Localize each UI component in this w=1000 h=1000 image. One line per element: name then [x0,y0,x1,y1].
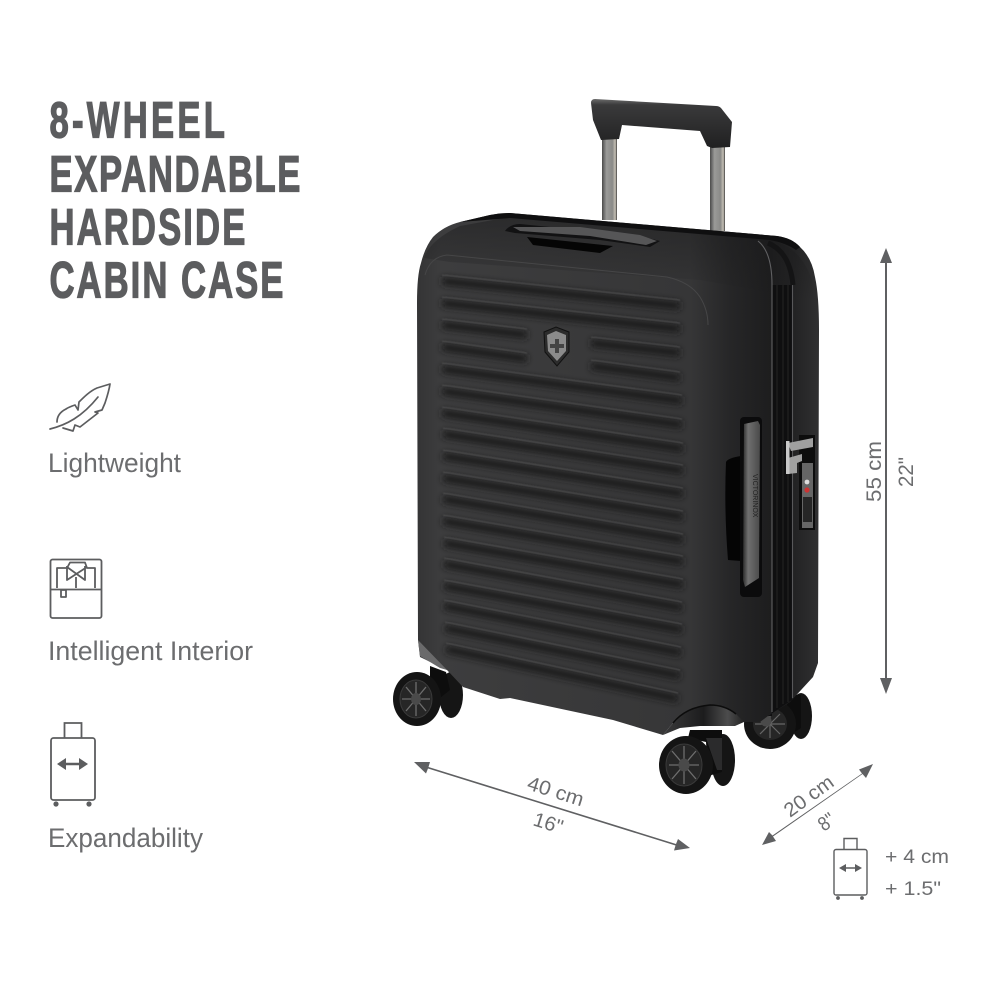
label: 55 cm: 55 cm [863,441,886,502]
face inset outline [425,255,708,325]
label: 8 inches: 8" [814,809,840,836]
top shading [424,217,814,300]
zipper [758,241,793,716]
wheel: front left [393,672,441,726]
label: plus 4 cm: + 4 cm [885,847,949,868]
icon: intelligent interior [50,560,102,618]
title: HARDSIDE [50,200,245,256]
wheel housing: bottom right [663,705,744,735]
label: 22 inches: 22" [895,457,918,487]
label: 40 cm: 40 cm [524,773,586,811]
wheel: front right [659,736,713,794]
suitcase [393,99,819,794]
title: 8-WHEEL [50,93,225,149]
case body [417,213,819,735]
corner guard: bottom left [418,640,447,670]
brand text on side handle: VICTORINOX [751,474,758,518]
rear wheels and casters [393,666,812,794]
ribs: highlight lines [442,275,683,693]
side carry handle [725,417,762,597]
title: EXPANDABLE [50,147,300,203]
telescopic poles [602,135,725,231]
wheel: rear right [744,699,796,749]
label: Intelligent Interior: Intelligent Interior [48,636,253,666]
ribs: shadow bands [442,281,683,699]
label: 20 cm: 20 cm [780,771,838,822]
title [50,93,300,309]
title: CABIN CASE [50,253,283,309]
top rim [460,213,800,250]
arrow: width [414,762,690,850]
arrow: depth [762,764,873,845]
top carry handle [505,224,660,253]
telescopic handle grip [591,99,732,148]
label: 16 inches: 16" [530,809,566,839]
label: Expandability: Expandability [48,823,203,853]
icon: feather [50,384,110,431]
logo shield [544,327,569,366]
label: plus 1.5 inches: + 1.5" [885,879,941,900]
combination lock [786,435,815,530]
arrow: height [880,248,892,694]
label: Lightweight: Lightweight [48,448,181,478]
icon: small expandability [834,838,867,900]
icon: expandability [51,723,95,807]
